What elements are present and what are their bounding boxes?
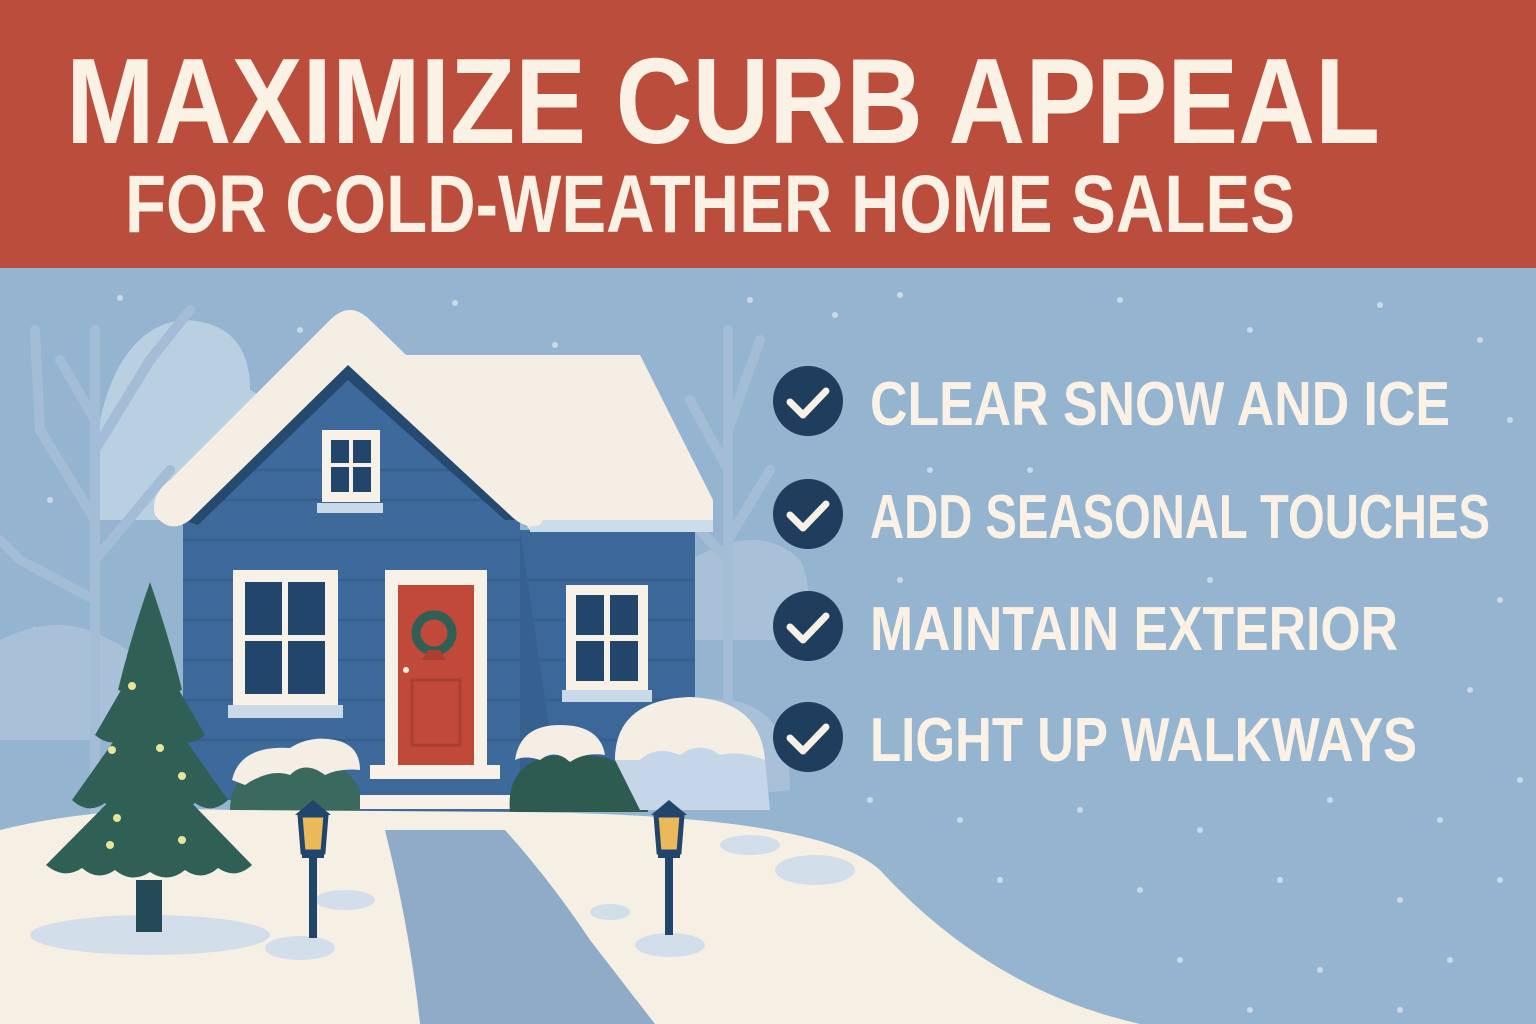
bare tree left xyxy=(0,310,190,820)
right wing xyxy=(515,530,695,800)
gable wall xyxy=(183,362,520,800)
checklist xyxy=(773,366,1490,775)
snowy ground xyxy=(0,809,1140,1024)
steps xyxy=(370,765,500,779)
snowflakes xyxy=(32,292,1523,1013)
bare tree right xyxy=(690,330,770,800)
lamp post left xyxy=(295,800,331,938)
right roof snow xyxy=(400,355,713,530)
background bushes and trees xyxy=(0,310,808,820)
upper window xyxy=(317,430,383,513)
right window xyxy=(562,585,652,702)
left window xyxy=(228,570,343,718)
pine tree xyxy=(46,582,252,932)
bushes xyxy=(230,697,770,812)
subtitle: FOR COLD-WEATHER HOME SALES xyxy=(125,159,1295,250)
header banner xyxy=(0,0,1536,268)
item: light walkways xyxy=(773,702,1417,775)
item: maintain exterior: MAINTAIN EXTERIOR xyxy=(870,595,1398,664)
background sky xyxy=(0,268,1536,1024)
door with wreath xyxy=(385,570,487,770)
house xyxy=(154,310,713,831)
title: MAXIMIZE CURB APPEAL xyxy=(66,33,1380,169)
item: light walkways: LIGHT UP WALKWAYS xyxy=(870,706,1417,775)
gable roof snow xyxy=(154,310,546,526)
item: maintain exterior xyxy=(773,591,1398,664)
lamp post right xyxy=(651,800,687,935)
walkway xyxy=(385,830,655,1024)
